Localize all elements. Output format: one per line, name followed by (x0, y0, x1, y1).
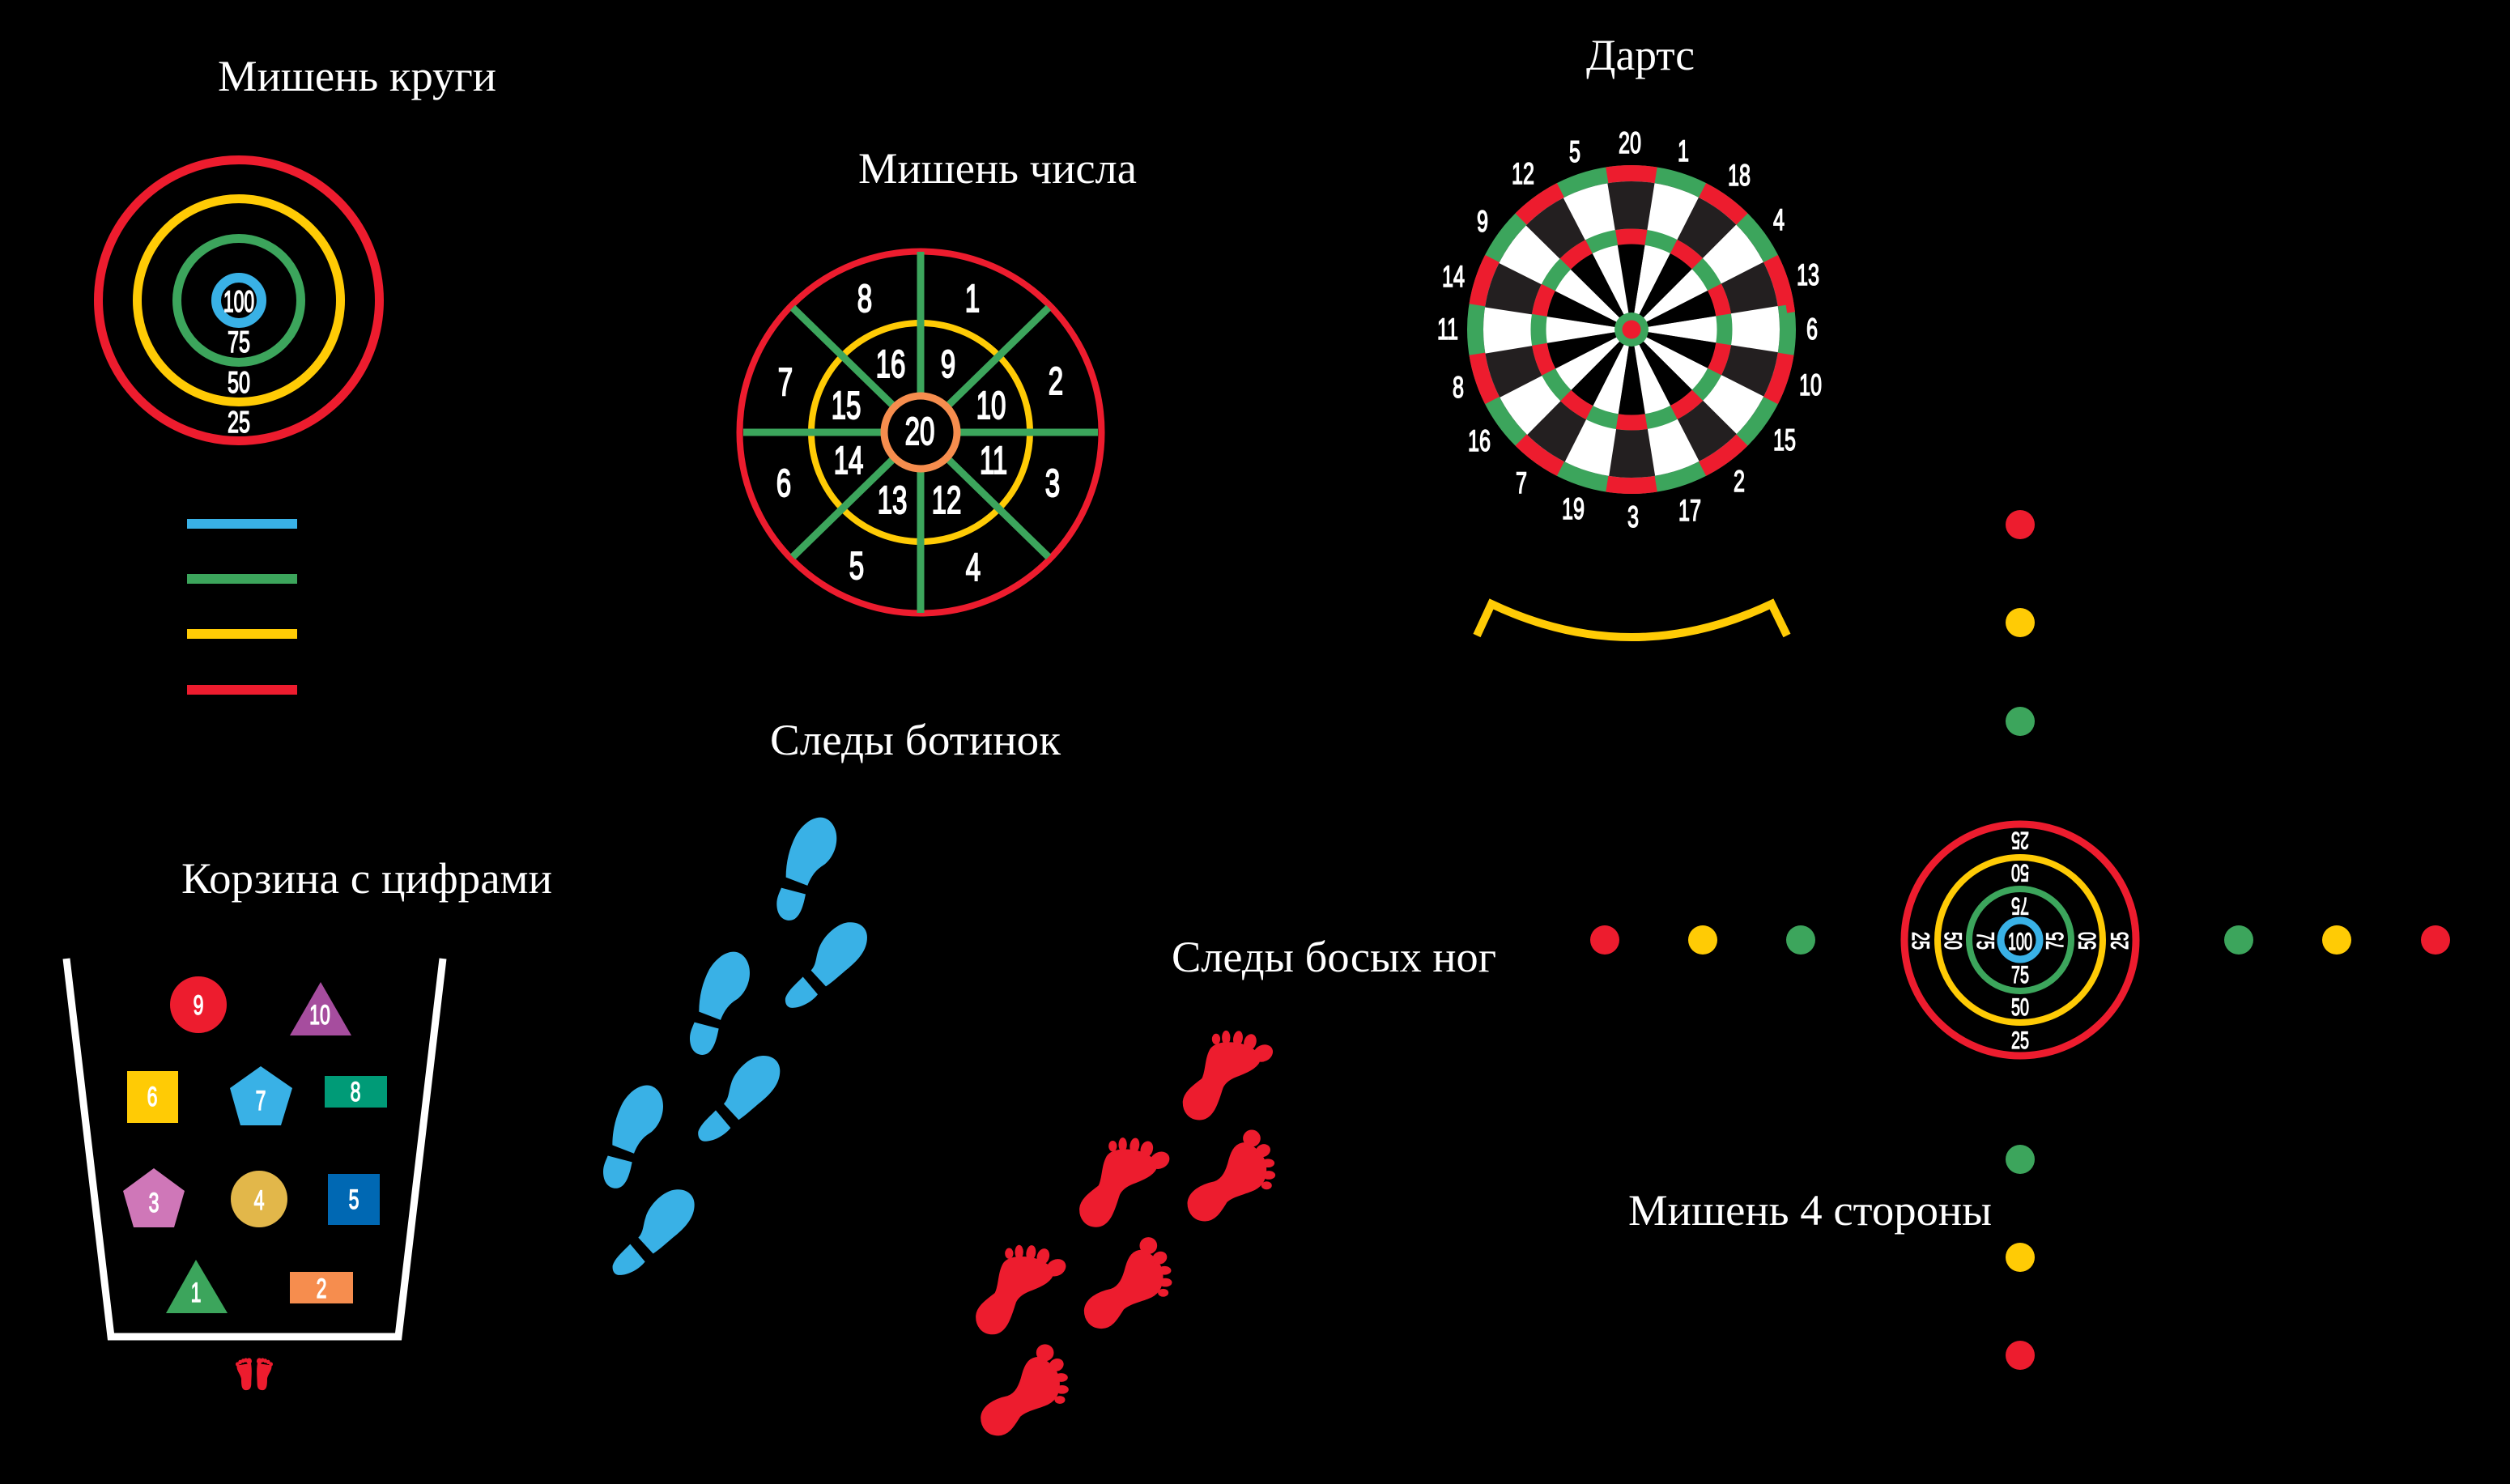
dots: left arm (1590, 925, 1815, 955)
target: four sides: 75 (1972, 932, 1998, 950)
target: numbers: 4 (966, 546, 981, 589)
colour throw lines (187, 519, 297, 695)
basket with numbered shapes: 6 (147, 1082, 157, 1112)
dartboard: 11 (1437, 312, 1458, 346)
dartboard: 19 (1562, 491, 1585, 525)
target: four sides (1904, 824, 2136, 1056)
dartboard (1437, 125, 1822, 534)
target: four sides: 25 (1907, 932, 1934, 950)
dartboard: 18 (1728, 158, 1751, 192)
dartboard: 6 (1806, 312, 1818, 346)
dartboard: 3 (1627, 500, 1639, 534)
dots: top arm (2006, 510, 2035, 736)
title: Корзина с цифрами: Корзина с цифрами (181, 854, 552, 903)
target: numbers: 14 (834, 439, 863, 482)
target: four sides: 100 (2008, 929, 2032, 955)
basket with numbered shapes: 2 (317, 1274, 326, 1304)
basket with numbered shapes: 7 (256, 1086, 266, 1116)
dots: bottom arm (2006, 1145, 2035, 1370)
target: circles (99, 160, 379, 440)
title: Следы ботинок: Следы ботинок (770, 716, 1061, 764)
target: numbers (740, 251, 1101, 614)
dartboard: 16 (1468, 423, 1491, 457)
dartboard: 8 (1453, 370, 1464, 404)
target: numbers: 13 (878, 478, 907, 521)
basket with numbered shapes: 8 (351, 1078, 360, 1108)
target: numbers: 6 (776, 461, 791, 504)
target: circles: 50 (228, 365, 250, 399)
target: four sides: 50 (2011, 859, 2029, 886)
dartboard: 20 (1619, 125, 1641, 159)
basket with numbered shapes: 4 (254, 1186, 264, 1216)
dartboard: 12 (1512, 156, 1534, 190)
target: circles: 75 (228, 325, 250, 359)
basket with numbered shapes: 9 (194, 991, 203, 1021)
dartboard: 5 (1569, 134, 1580, 168)
target: circles: 100 (223, 284, 254, 318)
target: numbers: 5 (849, 544, 864, 587)
target: four sides: 75 (2011, 892, 2029, 919)
target: numbers: 10 (976, 384, 1006, 427)
target: circles: 25 (228, 405, 250, 439)
target: four sides: 75 (2042, 932, 2069, 950)
target: four sides: 25 (2011, 1027, 2029, 1054)
target: four sides: 50 (2011, 994, 2029, 1021)
basket with numbered shapes (66, 959, 443, 1337)
dartboard: 13 (1797, 257, 1819, 291)
basket with numbered shapes: 3 (149, 1188, 159, 1218)
target: numbers: 3 (1045, 461, 1060, 504)
dartboard: 14 (1442, 259, 1465, 293)
target: numbers: 20 (905, 410, 934, 453)
dartboard: 9 (1477, 204, 1488, 238)
red bare foot prints (976, 1031, 1274, 1435)
dartboard: 17 (1678, 493, 1701, 527)
target: numbers: 11 (980, 439, 1007, 482)
dartboard: 1 (1678, 134, 1689, 168)
dartboard: 7 (1516, 466, 1527, 500)
basket with numbered shapes: 5 (349, 1185, 359, 1215)
dartboard: 2 (1734, 464, 1745, 498)
basket with numbered shapes: 10 (309, 1001, 330, 1031)
yellow throw line (1477, 604, 1787, 637)
dartboard: 4 (1773, 202, 1785, 236)
target: four sides: 25 (2107, 932, 2134, 950)
target: numbers: 15 (832, 384, 861, 427)
title: Мишень 4 стороны: Мишень 4 стороны (1628, 1186, 1992, 1235)
title: Дартс: Дартс (1586, 31, 1695, 79)
target: numbers: 1 (965, 277, 980, 320)
blue shoe prints (603, 818, 867, 1275)
dartboard: 15 (1773, 423, 1796, 457)
title: Мишень числа: Мишень числа (858, 144, 1137, 193)
target: four sides: 50 (2074, 932, 2101, 950)
target: four sides: 75 (2011, 962, 2029, 989)
target: four sides: 50 (1939, 932, 1966, 950)
target: numbers: 12 (932, 478, 961, 521)
dartboard: 10 (1799, 368, 1822, 402)
target: numbers: 2 (1049, 359, 1063, 402)
target: numbers: 16 (876, 342, 905, 385)
dots: right arm (2224, 925, 2450, 955)
target: numbers: 8 (857, 277, 872, 320)
title: Следы босых ног: Следы босых ног (1172, 933, 1496, 981)
target: four sides: 25 (2011, 827, 2029, 853)
target: numbers: 9 (941, 342, 955, 385)
icon: small red feet (236, 1358, 273, 1390)
basket with numbered shapes: 1 (191, 1278, 201, 1308)
target: numbers: 7 (778, 360, 793, 403)
title: Мишень круги: Мишень круги (218, 52, 496, 100)
